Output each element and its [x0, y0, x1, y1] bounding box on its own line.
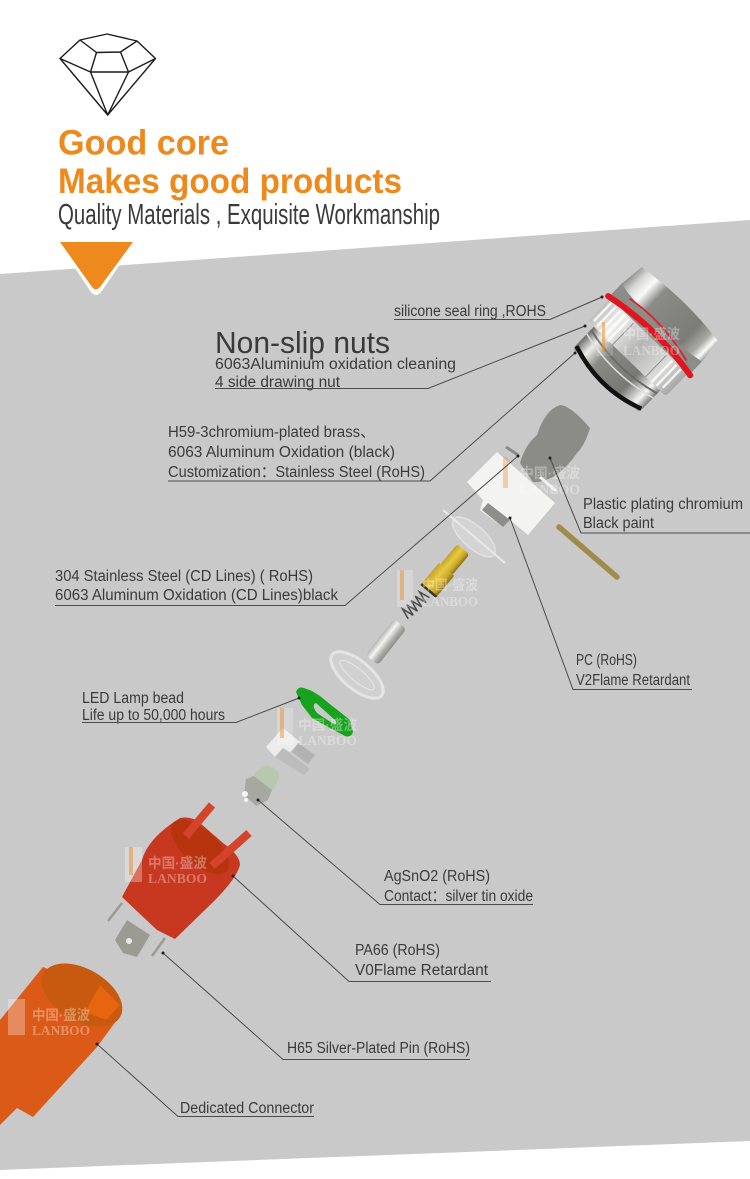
watermark: LED board: 中国·盛波	[298, 717, 357, 733]
label: silicone seal ring: silicone seal ring ,ROHS	[394, 303, 546, 320]
label: stainless steel: 6063 Aluminum Oxidation (CD Lines)black	[55, 587, 338, 604]
part: silver cylinder	[366, 619, 406, 665]
label: PA66 flame retardant	[232, 874, 491, 982]
label: plastic plating chromium	[548, 456, 750, 533]
title	[58, 124, 402, 201]
watermark: LED board: LANBOO	[298, 734, 357, 749]
label: chromium-plated brass: 6063 Aluminum Oxidation (black)	[168, 444, 395, 461]
watermark: housing	[503, 457, 580, 498]
label: chromium-plated brass: Customization：Stainless Steel (RoHS)	[168, 464, 425, 481]
part: LED bulb	[242, 766, 279, 806]
label: PC flame retardant: V2Flame Retardant	[576, 672, 691, 689]
icon: orange down triangle	[59, 241, 134, 294]
label: plastic plating chromium: Black paint	[583, 515, 655, 532]
part: gold cylinder	[420, 543, 471, 598]
label: non-slip nuts: Non-slip nuts	[215, 325, 390, 360]
watermark: connector	[8, 999, 90, 1039]
label: chromium-plated brass: H59-3chromium-plated brass、	[168, 424, 375, 441]
label: stainless steel	[55, 454, 520, 606]
label: stainless steel: 304 Stainless Steel (CD Lines) ( RoHS)	[55, 568, 313, 585]
label: AgSnO2 contact	[256, 798, 533, 905]
label: PA66 flame retardant: V0Flame Retardant	[355, 962, 489, 979]
label: non-slip nuts: 4 side drawing nut	[215, 374, 341, 391]
label: LED lamp bead	[82, 690, 300, 724]
watermark: housing: 中国·盛波	[520, 465, 580, 481]
part: white bracket	[266, 728, 315, 775]
label: plastic plating chromium: Plastic plating chromium	[583, 496, 743, 513]
label: non-slip nuts	[215, 324, 586, 391]
part: brass rod	[559, 527, 617, 577]
label: dedicated connector: Dedicated Connector	[180, 1100, 314, 1117]
watermark: nut: LANBOO	[623, 344, 680, 359]
watermark: gold cylinder	[397, 570, 478, 610]
label: silicone seal ring	[394, 296, 604, 320]
part: orange connector	[0, 950, 133, 1125]
part: green LED board	[296, 688, 353, 736]
part: clear ring	[323, 644, 391, 706]
watermark: red body: 中国·盛波	[148, 855, 207, 871]
label: silver-plated pin	[162, 952, 470, 1060]
watermark: nut	[597, 322, 680, 359]
label: PC flame retardant	[508, 516, 692, 690]
part: white housing block	[467, 447, 556, 535]
label: AgSnO2 contact: Contact：silver tin oxide	[384, 888, 533, 905]
label: LED lamp bead: LED Lamp bead	[82, 690, 184, 707]
label: AgSnO2 contact: AgSnO2 (RoHS)	[384, 868, 490, 885]
part: red switch body	[108, 805, 249, 957]
label: PC flame retardant: PC (RoHS)	[576, 652, 637, 669]
label: non-slip nuts: 6063Aluminium oxidation cleaning	[215, 356, 456, 373]
label: LED lamp bead: Life up to 50,000 hours	[82, 707, 225, 724]
subtitle: Quality Materials , Exquisite Workmanship	[58, 199, 440, 231]
part: rocker key	[520, 405, 590, 482]
watermark: nut: 中国·盛波	[623, 326, 680, 342]
watermark: red body: LANBOO	[148, 872, 207, 887]
title: Makes good products	[58, 162, 402, 201]
watermark: connector: 中国·盛波	[32, 1007, 90, 1023]
part: clear gasket	[443, 510, 505, 563]
label: chromium-plated brass	[168, 352, 576, 481]
part: spring	[400, 590, 430, 620]
watermark: gold cylinder: 中国·盛波	[422, 577, 478, 593]
icon: diamond	[60, 34, 156, 115]
watermark: red body	[125, 847, 207, 887]
watermark: housing: LANBOO	[520, 483, 580, 498]
watermark: gold cylinder: LANBOO	[422, 595, 478, 610]
label: silver-plated pin: H65 Silver-Plated Pin (RoHS)	[287, 1040, 470, 1057]
label: PA66 flame retardant: PA66 (RoHS)	[355, 942, 440, 959]
label: dedicated connector	[96, 1042, 314, 1117]
watermark: LED board	[277, 708, 357, 749]
part: metal nut assembly	[561, 262, 724, 424]
watermark: connector: LANBOO	[32, 1024, 90, 1039]
title: Good core	[58, 124, 229, 162]
